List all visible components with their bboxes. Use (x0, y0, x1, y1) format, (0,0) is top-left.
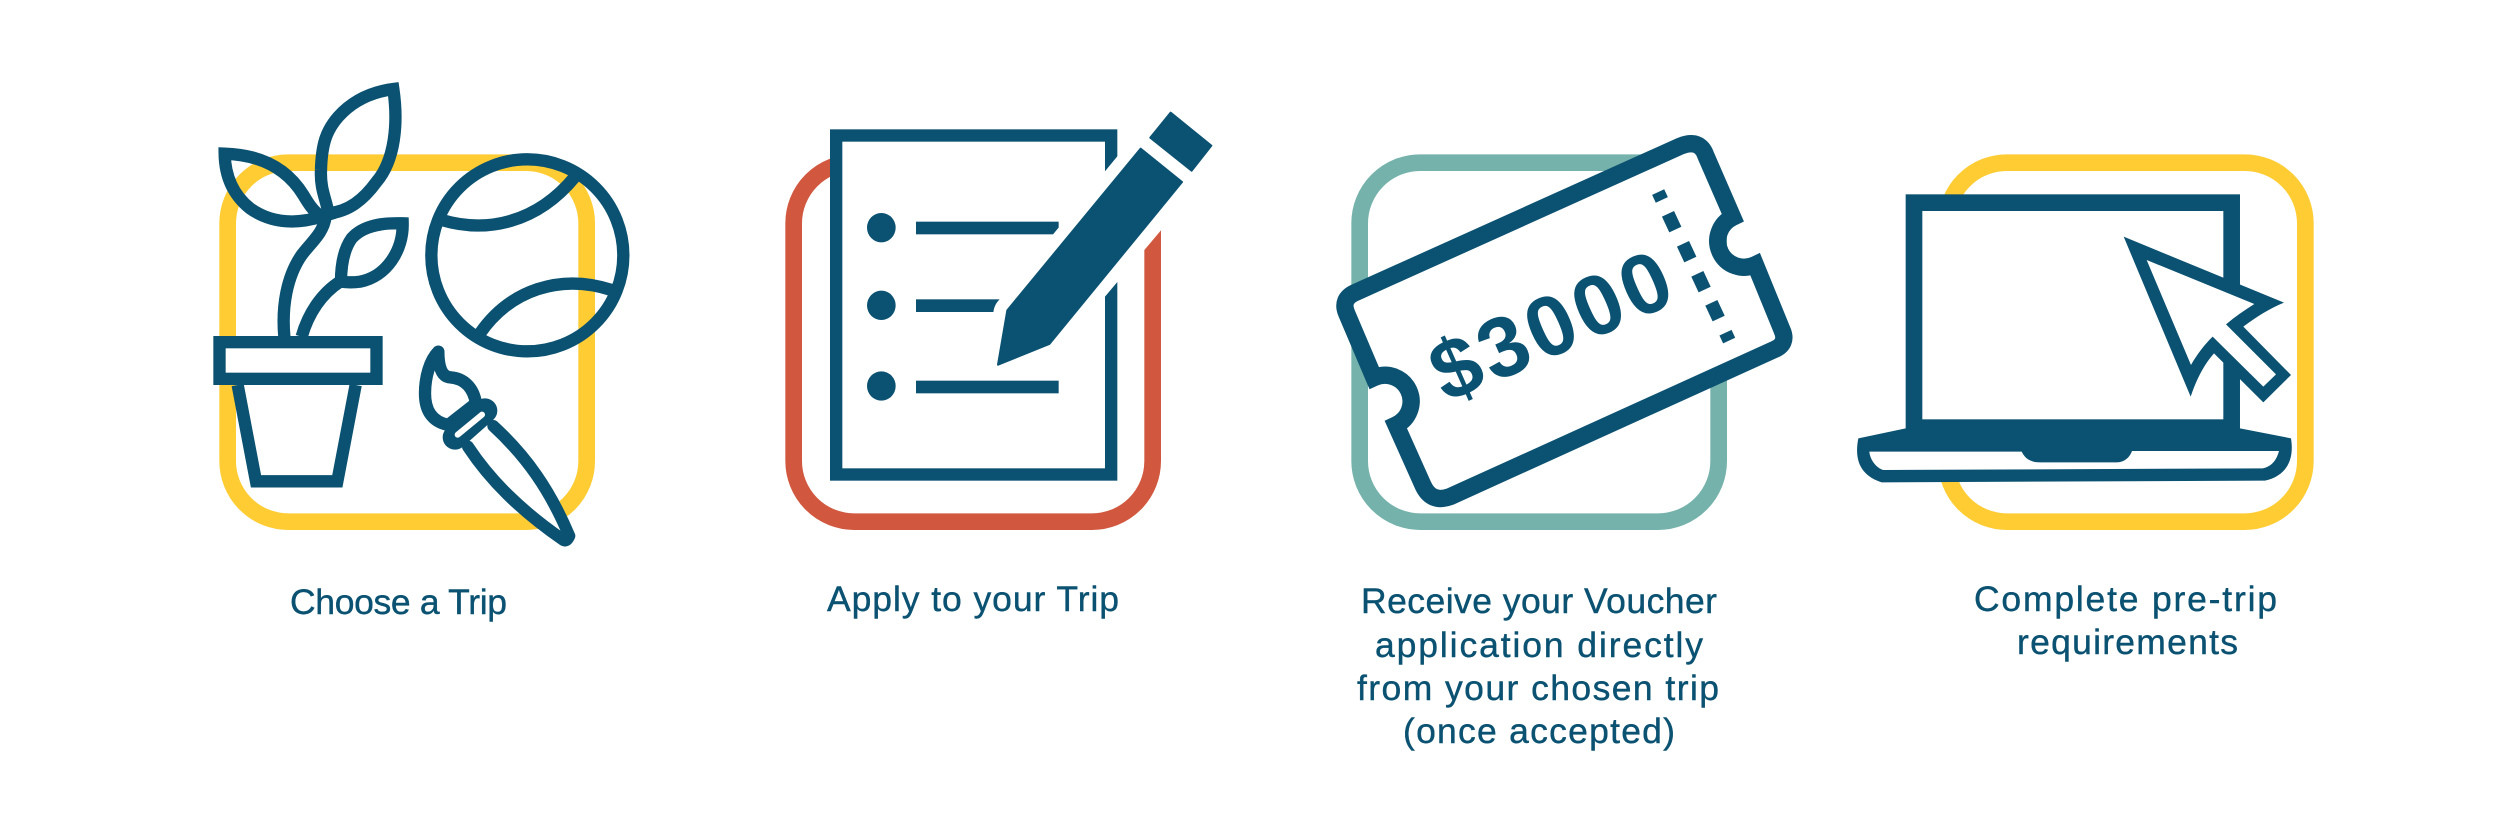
ticket outline (1345, 144, 1784, 499)
ball (431, 159, 623, 351)
red rounded square (794, 163, 1153, 522)
laptop (1857, 203, 2292, 482)
ticket perforation (1652, 189, 1735, 343)
pencil (998, 113, 1211, 365)
plant (219, 89, 403, 481)
caption: Complete pre-trip requirements: Complete pre-trip (1974, 579, 2277, 619)
caption: Receive your Voucher: from your chosen trip (1357, 668, 1719, 708)
caption: Complete pre-trip requirements (1974, 579, 2277, 662)
yellow rounded square (228, 163, 587, 522)
icon: $3000 voucher ticket on teal square (1345, 144, 1784, 522)
caption: Complete pre-trip requirements: requirements (2017, 622, 2238, 662)
caption: Receive your Voucher (1357, 581, 1719, 751)
cursor arrow (2124, 237, 2291, 402)
caption: Receive your Voucher: Receive your Voucher (1361, 581, 1717, 621)
icon: laptop and cursor on yellow square (1857, 163, 2305, 522)
document (836, 135, 1111, 474)
icon: checklist and pencil on red square (794, 88, 1240, 522)
caption: Receive your Voucher: (once accepted) (1403, 711, 1675, 751)
caption: Apply to your Trip: Apply to your Trip (827, 579, 1119, 619)
ticket amount: $3000 (1416, 230, 1690, 421)
yellow rounded square (1946, 163, 2305, 522)
paintbrush (425, 352, 569, 540)
caption: Choose a Trip: Choose a Trip (290, 582, 507, 622)
caption: Receive your Voucher: application directly (1375, 625, 1703, 665)
teal rounded square (1360, 163, 1719, 522)
icon: plant, ball and paintbrush on yellow square (219, 89, 623, 540)
